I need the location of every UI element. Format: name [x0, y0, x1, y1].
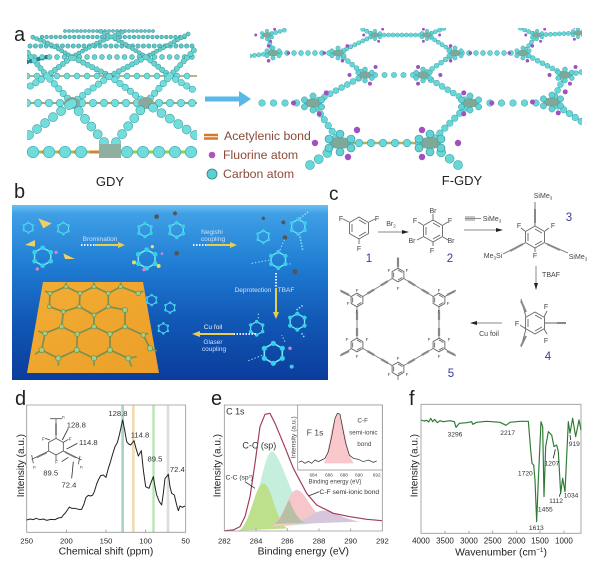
hubs mid — [64, 97, 154, 109]
axis text f: 3000 — [460, 537, 478, 546]
panel label d: d — [15, 388, 26, 410]
mid tier chains — [316, 75, 564, 100]
compound 3: SiMe — [534, 193, 550, 200]
panel e: XPS chart — [213, 405, 389, 558]
panel a: GDY lattice — [27, 31, 197, 158]
inset labels d: 114.8 — [79, 438, 98, 447]
compound 5: F — [438, 309, 441, 314]
hubs — [312, 127, 360, 160]
row y152 — [33, 146, 197, 158]
compound 3: F — [517, 223, 521, 230]
arrow a — [205, 91, 251, 107]
panel label c: c — [329, 184, 338, 205]
reaction text b: Deprotection — [235, 287, 272, 294]
legend: acetylenic bond: Acetylenic bond — [224, 129, 311, 143]
axes box — [27, 405, 186, 532]
compound 4 — [515, 299, 566, 363]
compound 4: F — [544, 304, 548, 311]
compound 5: F — [406, 268, 409, 273]
inset box: F 1s — [307, 428, 324, 438]
arrow Cu foil — [470, 321, 502, 338]
row y103 — [262, 100, 540, 106]
compound 3: F — [533, 253, 537, 260]
far rows — [65, 29, 155, 33]
arrow alkyne reagent: SiMe — [483, 216, 499, 223]
inset labels d: 72.4 — [62, 481, 77, 490]
compound 2: F — [448, 218, 452, 225]
inset box: 690 — [355, 472, 363, 477]
axis text d: 50 — [181, 537, 190, 546]
axis text e: 284 — [250, 537, 263, 546]
peak labels f — [448, 430, 580, 532]
reaction text b: Bromination — [83, 236, 118, 243]
inset labels d: n — [33, 465, 36, 470]
axis text f — [409, 434, 573, 558]
row y76 — [27, 73, 197, 79]
right part of floating molecules — [288, 212, 308, 369]
reaction text b: TBAF — [278, 287, 294, 294]
compound 3 — [484, 193, 588, 262]
tier chains — [338, 53, 582, 75]
axis text e: 292 — [376, 537, 389, 546]
coloured bands — [121, 405, 169, 532]
peak labels d: 114.8 — [131, 430, 149, 439]
inset box: 692 — [373, 472, 381, 477]
inset labels d: F — [69, 437, 72, 442]
envelope — [224, 413, 382, 531]
compound 5: F — [397, 356, 400, 361]
axis text f: 2000 — [508, 537, 526, 546]
compound 1 — [339, 216, 379, 265]
row y103 — [27, 99, 197, 107]
compound 5: F — [347, 301, 350, 306]
compound 3: 3 — [550, 196, 553, 200]
GDY caption: GDY — [96, 174, 124, 189]
peak labels d: 128.8 — [108, 409, 128, 418]
reaction text b: Negishi — [201, 229, 223, 236]
arrow Br2 — [378, 221, 409, 234]
compound 5: 5 — [448, 368, 454, 380]
callout arrows e — [245, 482, 319, 496]
labels e: C-C (sp) — [242, 441, 276, 451]
labels e — [226, 407, 379, 496]
labels e: C 1s — [226, 407, 245, 417]
peak labels f: 1034 — [564, 492, 579, 499]
axis text f: Intensity (a.u.) — [409, 434, 420, 497]
axes box — [224, 405, 382, 531]
inset box: semi-ionic — [349, 430, 378, 437]
inset box: Intensity (a.u.) — [290, 416, 297, 458]
panel a: F-GDY lattice — [250, 26, 592, 165]
arrow alkyne reagent — [464, 216, 503, 232]
compound 5: F — [388, 372, 391, 377]
reaction text b: Cu foil — [204, 324, 223, 331]
front beads — [359, 139, 420, 147]
compound 3: 3 — [566, 212, 572, 224]
compound 5: F — [438, 288, 441, 293]
axis text d: Intensity (a.u.) — [16, 434, 27, 497]
axis text d: 250 — [20, 537, 33, 546]
peak labels f: 1720 — [518, 471, 533, 478]
axis text d: 200 — [60, 537, 73, 546]
row y143 — [350, 142, 420, 144]
peak arrows f — [553, 435, 571, 497]
compound 4: F — [544, 338, 548, 345]
inset box: 684 — [309, 472, 318, 477]
peak labels f: 919 — [569, 441, 580, 448]
peak labels f: 3296 — [448, 432, 463, 439]
compound 5: F — [447, 301, 450, 306]
axis text d — [16, 434, 190, 558]
axes box — [421, 404, 581, 533]
arrow Cu foil: Cu foil — [479, 331, 499, 338]
inset labels d: n — [80, 465, 83, 470]
compound 1: F — [375, 216, 379, 223]
compound 3: SiMe — [569, 254, 585, 261]
tier 1 diagonals — [29, 103, 195, 142]
lower diagonal chains — [314, 106, 582, 138]
arrow Br2: 2 — [393, 224, 396, 228]
axis text d: 150 — [100, 537, 112, 546]
compound 3: Si — [496, 253, 503, 260]
arrow TBAF: TBAF — [542, 272, 560, 279]
compound 4: 4 — [545, 351, 552, 363]
peak labels f: 2217 — [500, 430, 515, 437]
compound 2: Br — [448, 238, 455, 245]
labels e: C-C (sp — [226, 475, 249, 482]
compound 3: F — [551, 223, 555, 230]
compound 2: F — [413, 218, 417, 225]
axis text e: 282 — [218, 537, 231, 546]
axis text f: Wavenumber (cm — [455, 547, 536, 558]
front hub — [99, 144, 121, 158]
compound 2: F — [430, 248, 434, 255]
inset labels d: n — [62, 415, 65, 420]
upper chains — [273, 50, 523, 56]
compound 2: 2 — [447, 253, 453, 265]
panel f: FTIR chart — [409, 404, 581, 558]
axis text f: 1000 — [555, 537, 573, 546]
inset structure d — [32, 418, 82, 478]
axis text f: ) — [543, 547, 547, 558]
reaction text b: coupling — [202, 346, 226, 353]
axis text e: 290 — [344, 537, 357, 546]
peak labels f: 1207 — [545, 460, 560, 467]
axis text e: Intensity (a.u.) — [213, 434, 224, 497]
reaction text b: coupling — [201, 236, 225, 243]
F-GDY caption: F-GDY — [442, 173, 483, 188]
panel label b: b — [14, 181, 25, 203]
legend: carbon atom: Carbon atom — [223, 167, 294, 181]
inset labels d — [33, 415, 98, 490]
axis text f: 4000 — [412, 537, 430, 546]
compound 3: 3 — [585, 256, 588, 262]
axis text f: 2500 — [484, 537, 502, 546]
inset box: C-F — [357, 418, 368, 425]
legend: fluorine atom: Fluorine atom — [223, 148, 298, 162]
axis text e: Binding energy (eV) — [258, 547, 349, 558]
compound 5: F — [356, 354, 359, 359]
arrow Br2: Br — [386, 221, 393, 228]
compound 5: F — [438, 354, 441, 359]
floating molecules — [23, 211, 290, 366]
panel d: NMR chart — [16, 405, 190, 558]
inset labels d: 128.8 — [67, 420, 86, 429]
reaction text b: Glaser — [203, 339, 223, 346]
inset box: 688 — [340, 472, 348, 477]
inset box: 686 — [325, 472, 333, 477]
labels e: C-F semi-ionic bond — [320, 489, 379, 496]
compound 5: F — [346, 337, 349, 342]
panel label a: a — [14, 24, 26, 46]
compound 1: F — [357, 246, 361, 253]
compound 5: F — [356, 288, 359, 293]
spectrum — [421, 418, 581, 522]
compound 5: F — [428, 337, 431, 342]
acetylenic bonds — [27, 76, 197, 152]
arrow alkyne reagent: 3 — [499, 218, 502, 224]
row y75 — [375, 72, 415, 78]
compound 5: F — [397, 286, 400, 291]
process arrows b — [81, 242, 279, 337]
labels e: ) — [251, 475, 253, 482]
panel c: synthesis scheme — [339, 193, 588, 380]
inset labels d: F — [42, 437, 45, 442]
far diagonals — [27, 31, 190, 62]
peak labels d — [108, 409, 186, 474]
arrow TBAF — [534, 266, 560, 290]
axis text e: 286 — [281, 537, 294, 546]
compound 2: Br — [408, 238, 416, 245]
compound 5 — [340, 257, 456, 380]
axis text e — [213, 434, 389, 558]
inset box — [290, 405, 382, 486]
panel label e: e — [211, 388, 222, 410]
reaction text b — [83, 229, 294, 353]
spectrum — [27, 420, 185, 520]
axis text f: 3500 — [436, 537, 454, 546]
compound 5: F — [356, 309, 359, 314]
compound 2 — [408, 208, 455, 265]
compound 4: F — [515, 321, 519, 328]
compound 1: F — [339, 216, 343, 223]
peak labels d: 89.5 — [148, 454, 162, 463]
honeycomb network — [35, 283, 157, 367]
tier 3 diagonals — [27, 47, 197, 76]
row y37 — [42, 35, 188, 39]
axis text d: Chemical shift (ppm) — [59, 547, 153, 558]
inset box: Binding energy (eV) — [309, 480, 361, 486]
labels e: 2 — [249, 474, 252, 479]
compound 1: 1 — [366, 253, 372, 265]
panel b: synthesis illustration — [12, 205, 328, 380]
compound 5: F — [406, 372, 409, 377]
peak labels f: 1613 — [529, 525, 544, 532]
fitted peaks — [238, 452, 360, 531]
row y46 — [30, 44, 197, 48]
compound 5: F — [388, 268, 391, 273]
inset box: bond — [357, 441, 372, 448]
peak labels f: 1112 — [549, 498, 563, 505]
axis text f: 1500 — [531, 537, 549, 546]
compound 3: 3 — [493, 256, 496, 260]
legend — [204, 129, 311, 181]
compound 3: Me — [484, 253, 493, 260]
front legs — [310, 150, 458, 165]
row y57 — [27, 54, 197, 60]
compound 5: F — [448, 337, 451, 342]
inset labels d: F — [55, 459, 58, 464]
panel label f: f — [409, 388, 415, 410]
compound 5: F — [366, 337, 369, 342]
axis text d: 100 — [139, 537, 152, 546]
far chains — [250, 28, 578, 56]
peak labels f: 1455 — [538, 507, 553, 514]
peak labels d: 72.4 — [170, 465, 186, 474]
axis text e: 288 — [313, 537, 325, 546]
inset labels d: 89.5 — [43, 468, 58, 477]
axis text f: −1 — [536, 547, 544, 554]
gold copper foil — [27, 282, 159, 373]
tier 2 diagonals — [27, 76, 197, 103]
compound 2: Br — [430, 208, 437, 215]
